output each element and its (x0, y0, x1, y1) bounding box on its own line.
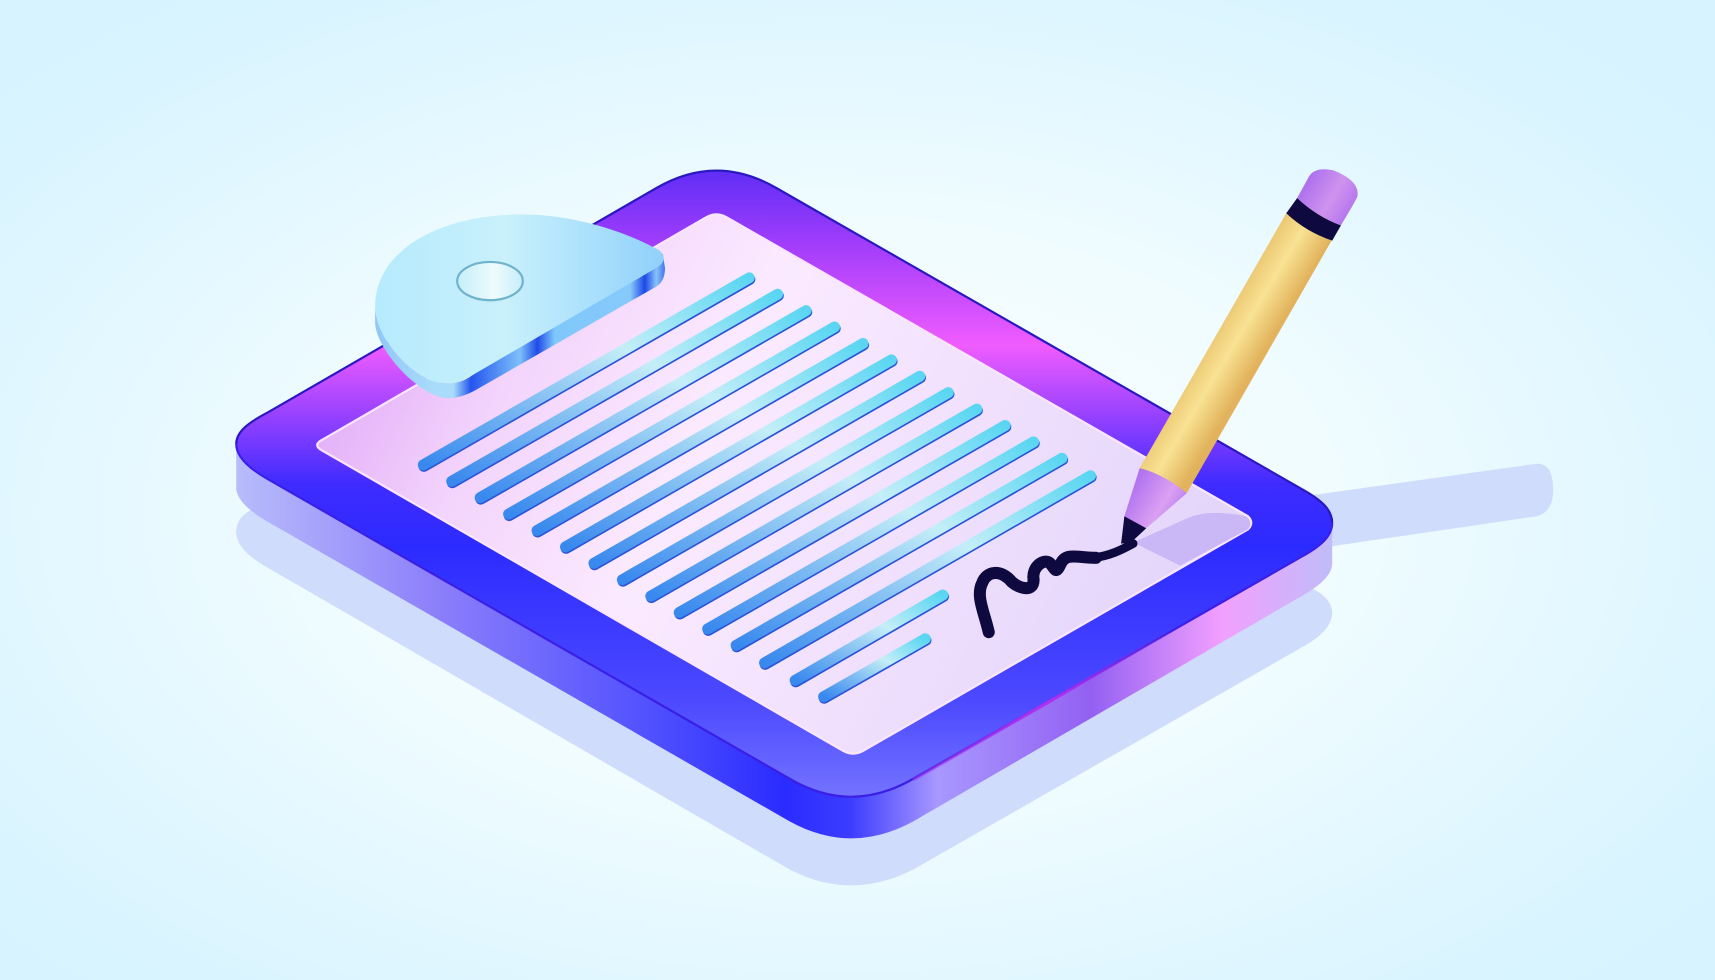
clip top face (375, 214, 664, 383)
clip side thickness (375, 254, 665, 398)
line underside edges (424, 279, 1091, 698)
board top face (236, 171, 1332, 797)
board lower edge highlight (236, 444, 1332, 797)
pencil ferrule band (1286, 198, 1341, 241)
signature (980, 544, 1133, 632)
pencil (1121, 169, 1358, 544)
clipboard board (236, 171, 1332, 838)
pencil eraser (1297, 169, 1358, 225)
board upper edge highlight (236, 171, 1332, 523)
clip hole (457, 262, 523, 300)
clipboard clip (375, 214, 665, 398)
board side thickness (236, 444, 1332, 838)
board magenta edge accent (913, 626, 1181, 780)
text lines on document (423, 278, 1091, 698)
line faces (423, 278, 1090, 697)
floor shadow of pencil (1302, 464, 1553, 549)
floor shadow of clipboard (236, 503, 1332, 885)
pencil shadow on paper (1133, 513, 1250, 565)
paper sheet (317, 214, 1251, 754)
pencil wooden body (1140, 213, 1332, 493)
pencil cone (1124, 468, 1187, 528)
pencil black tip (1121, 516, 1146, 544)
